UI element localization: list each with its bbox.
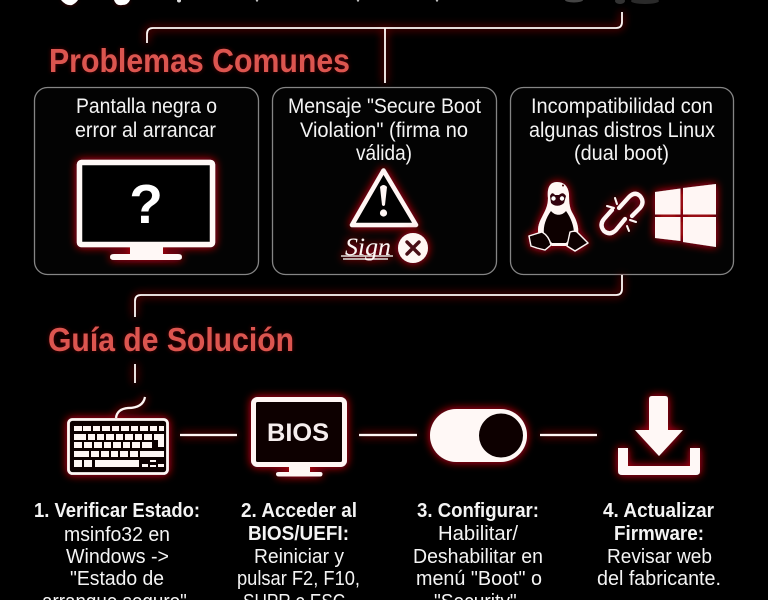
panel text: incompatibilidad linux: algunas distros Linux <box>529 119 715 142</box>
icon: monitor with question mark: ? <box>129 173 163 235</box>
step 2: acceder al BIOS <box>237 400 360 600</box>
step 1 text: Windows -> <box>66 546 169 568</box>
connector: step 3 to 4 <box>540 434 597 436</box>
panel text: pantalla negra: Pantalla negra o <box>76 95 217 118</box>
panel text: incompatibilidad linux: (dual boot) <box>574 142 669 165</box>
panel: incompatibilidad linux <box>510 88 734 274</box>
icon: monitor with question mark <box>80 162 212 260</box>
heading: Problemas Comunes: Problemas Comunes <box>49 42 350 79</box>
icon: BIOS monitor <box>254 400 344 476</box>
icon: download <box>618 396 700 475</box>
connector: step 2 to 3 <box>359 434 417 436</box>
step 4 text: del fabricante. <box>597 568 721 590</box>
icon: windows logo <box>655 184 716 247</box>
icon: linux penguin <box>529 182 588 251</box>
step 4: actualizar firmware <box>597 396 721 590</box>
step 3 text: Deshabilitar en <box>413 546 543 568</box>
heading: Guía de Solución: Guía de Solución <box>48 321 294 358</box>
icon: invalid signature <box>341 233 428 263</box>
step 2 text: BIOS/UEFI: <box>248 523 349 545</box>
step 3 text <box>413 500 543 600</box>
step 1 text: msinfo32 en <box>64 524 170 546</box>
step 2 text: Reiniciar y <box>254 546 344 568</box>
panel text: pantalla negra: error al arrancar <box>75 119 216 142</box>
panel: secure boot violation <box>272 88 496 274</box>
step 4 text: 4. Actualizar <box>603 500 714 522</box>
step 2 text: pulsar F2, F10, <box>237 568 360 590</box>
step 1 text <box>34 500 200 600</box>
step 3 text: menú "Boot" o <box>416 568 542 590</box>
panel text: incompatibilidad linux <box>529 95 715 165</box>
icon: BIOS monitor: BIOS <box>267 419 329 447</box>
step 3: configurar <box>413 409 543 600</box>
cropped header fragments <box>61 0 659 5</box>
panel text: secure boot violation <box>288 95 481 165</box>
icon: keyboard <box>68 397 168 474</box>
panel text: pantalla negra <box>75 95 217 142</box>
connector: heading to steps <box>134 364 136 383</box>
connector: step 1 to 2 <box>180 434 237 436</box>
step 4 text: Revisar web <box>607 546 712 568</box>
connector: header to problems <box>147 12 622 83</box>
icon: invalid signature: Sign <box>345 234 391 261</box>
step 4 text <box>597 500 721 590</box>
step 4 text: Firmware: <box>614 523 704 545</box>
panel text: secure boot violation: Mensaje "Secure Boot <box>288 95 481 118</box>
icon: broken chain link <box>602 194 642 233</box>
icon: warning triangle <box>352 170 416 225</box>
panel text: incompatibilidad linux: Incompatibilidad con <box>531 95 713 118</box>
icon: toggle switch <box>430 409 527 462</box>
step 3 text: 3. Configurar: <box>417 500 539 522</box>
panel text: secure boot violation: Violation" (firma no <box>300 119 468 142</box>
step 1: verificar estado <box>34 397 200 600</box>
connector: problems to solution <box>135 275 622 317</box>
step 2 text: 2. Acceder al <box>241 500 357 522</box>
step 1 text: 1. Verificar Estado: <box>34 500 200 522</box>
panel: pantalla negra <box>34 88 258 274</box>
step 1 text: "Estado de <box>70 568 164 590</box>
step 3 text: Habilitar/ <box>438 523 518 545</box>
panel text: secure boot violation: válida) <box>356 142 412 165</box>
step 2 text <box>237 500 360 600</box>
